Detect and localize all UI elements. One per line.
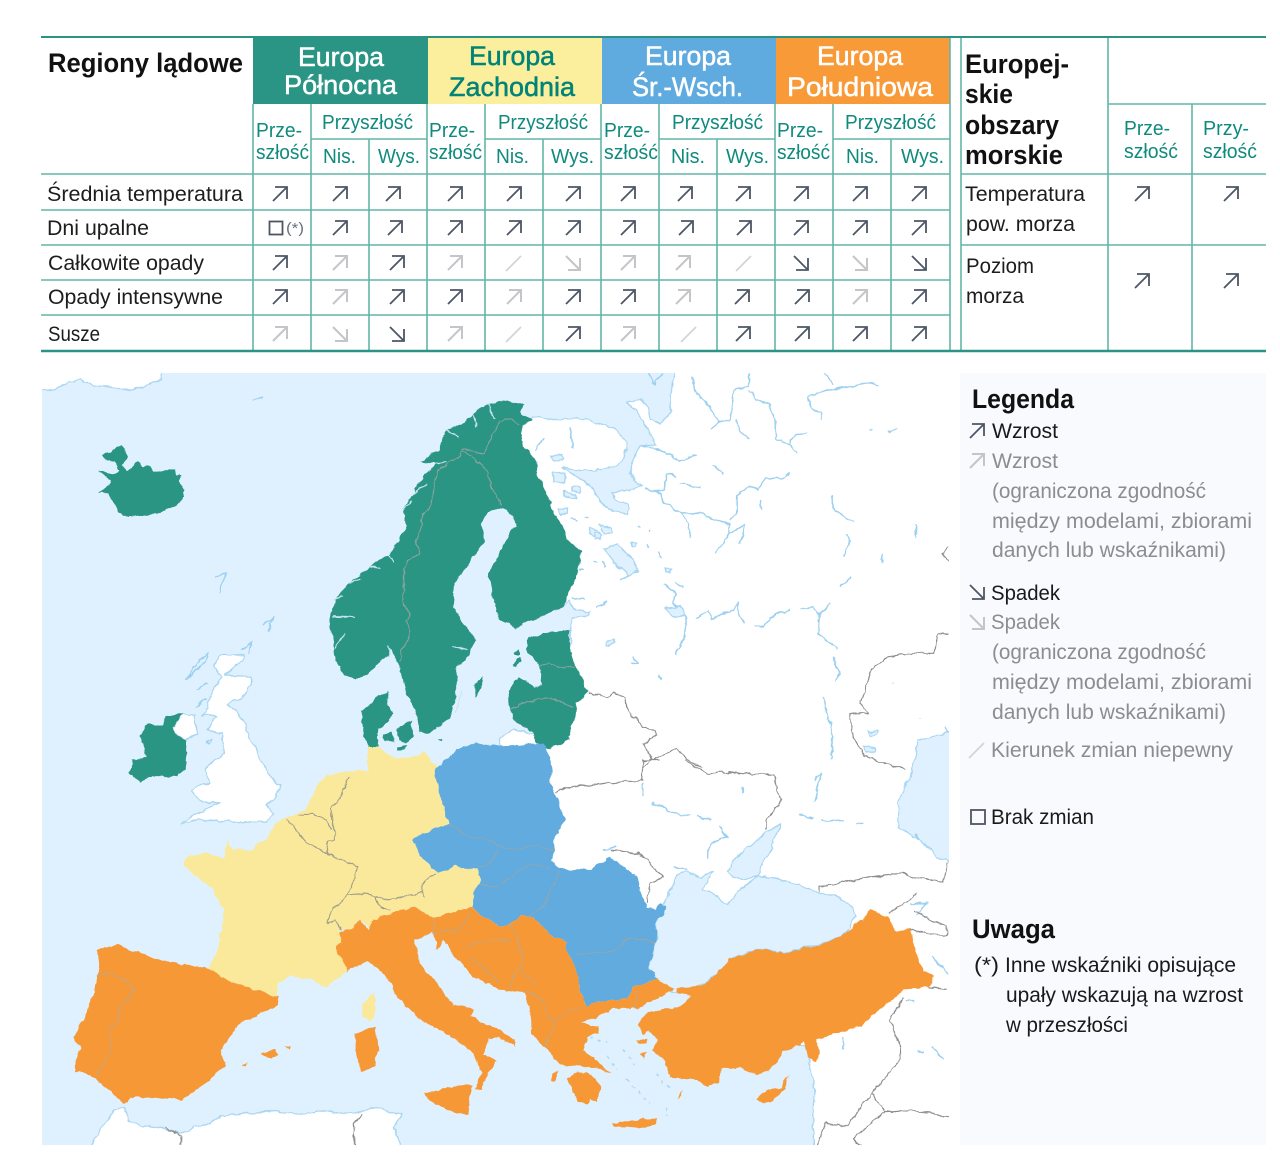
sea: Black Sea and Sea of Azov — [648, 727, 967, 993]
heading: Regiony lądowe: Regiony lądowe — [48, 48, 243, 78]
column labels: Europa Środkowo-Wschodnia: Przyszłość — [672, 112, 763, 134]
column labels: marine areas — [1124, 118, 1257, 163]
row: Poziom morza — [966, 255, 1238, 308]
column labels: marine areas: Prze- — [1124, 118, 1170, 140]
legend item: Brak zmian: Brak zmian — [991, 806, 1094, 829]
header: Europa Południowa: Południowa — [787, 72, 934, 102]
row: Dni upalne: (*) — [286, 220, 304, 237]
row: Opady intensywne — [48, 286, 926, 309]
land: United Kingdom — [170, 397, 280, 823]
header: Europa Zachodnia — [428, 37, 602, 104]
column labels: Europa Północna — [256, 112, 420, 168]
heading: Europejskie obszary morskie: skie — [965, 79, 1013, 109]
column labels: Europa Środkowo-Wschodnia: Nis. — [671, 146, 705, 168]
header: Europa Północna — [253, 37, 428, 104]
column labels: Europa Zachodnia: Wys. — [551, 146, 594, 168]
land: North Africa — [90, 1106, 403, 1145]
header: Europa Środkowo-Wschodnia — [602, 37, 776, 104]
Balearic Islands — [262, 1048, 278, 1060]
row: Całkowite opady: Całkowite opady — [48, 252, 204, 275]
column labels: Europa Zachodnia: szłość — [429, 142, 482, 164]
row: Poziom morza: morza — [966, 285, 1024, 308]
Baltic states — [508, 630, 588, 748]
Norway, Sweden, Finland — [330, 400, 583, 733]
legend item: Spadek: Spadek — [991, 582, 1060, 605]
column labels: Europa Zachodnia: Nis. — [496, 146, 529, 168]
legend item: Wzrost, limited agreement — [970, 450, 1252, 562]
column labels: Europa Środkowo-Wschodnia — [604, 112, 769, 168]
Crete — [612, 1118, 657, 1128]
column labels: Europa Zachodnia: Przyszłość — [498, 112, 588, 134]
Germany, Benelux, France, Switzerland, Austria — [183, 747, 480, 997]
header: Europa Północna: Północna — [284, 70, 398, 100]
heading: Europejskie obszary morskie: morskie — [965, 140, 1063, 170]
legend item: Wzrost, limited agreement: Wzrost — [992, 450, 1058, 473]
Italy — [335, 907, 515, 1088]
Iceland — [97, 446, 184, 517]
row: Dni upalne — [47, 217, 926, 240]
land: eastern Europe and the Middle East — [500, 357, 973, 1170]
column labels: marine areas: Przy- — [1203, 118, 1249, 140]
legend item: Kierunek zmian niepewny: Kierunek zmian niepewny — [991, 739, 1234, 762]
Ireland — [128, 713, 187, 782]
column labels: Europa Południowa: szłość — [777, 142, 830, 164]
note text: Inne wskaźniki opisujące — [1005, 954, 1236, 977]
column labels: Europa Południowa — [777, 112, 944, 168]
borders: Scandinavia and Baltic states — [400, 418, 575, 710]
column labels: Europa Południowa: Nis. — [846, 146, 879, 168]
legend item: Spadek, limited agreement — [970, 611, 1252, 724]
heading: Legenda: Legenda — [972, 384, 1075, 414]
column labels: Europa Północna: Prze- — [256, 120, 302, 142]
row: Średnia temperatura — [47, 182, 926, 206]
column labels: Europa Północna: szłość — [256, 142, 309, 164]
legend item: Spadek, limited agreement: Spadek — [991, 611, 1060, 634]
note text: w przeszłości — [1005, 1014, 1128, 1037]
note text — [974, 954, 1243, 1037]
column labels: Europa Południowa: Wys. — [901, 146, 944, 168]
legend item: Wzrost, limited agreement: danych lub wskaźnikami) — [992, 539, 1226, 562]
legend item: Spadek, limited agreement: (ograniczona zgodność — [992, 641, 1206, 664]
header: Europa Północna: Europa — [298, 42, 385, 72]
Cyprus — [757, 1073, 789, 1103]
column labels: Europa Zachodnia: Prze- — [429, 120, 475, 142]
Poland, Czechia, Slovakia, Hungary, Romania, Bulgaria — [412, 743, 666, 1007]
header: Europa Środkowo-Wschodnia: Śr.-Wsch. — [632, 70, 743, 102]
region: Europa Południowa (orange) — [73, 907, 935, 1128]
heading: Europejskie obszary morskie: obszary — [965, 110, 1059, 140]
Corsica — [362, 992, 375, 1022]
rivers and lakes: northern Russia — [535, 373, 948, 760]
heading: Europejskie obszary morskie — [965, 49, 1069, 170]
column labels: Europa Środkowo-Wschodnia: Prze- — [604, 120, 650, 142]
borders: southern Europe — [97, 913, 500, 1075]
Iberian Peninsula — [73, 907, 515, 1115]
column labels: Europa Środkowo-Wschodnia: Wys. — [726, 146, 769, 168]
legend item: Spadek, limited agreement: między modelami, zbiorami — [992, 671, 1252, 694]
Balkan Peninsula — [433, 908, 675, 1073]
row: Całkowite opady — [48, 252, 926, 275]
heading: Europejskie obszary morskie: Europej- — [965, 49, 1069, 79]
region: Europa Północna (teal) — [97, 400, 588, 782]
Denmark — [362, 690, 393, 747]
column labels: Europa Południowa: Przyszłość — [845, 112, 936, 134]
region: Europa Zachodnia (yellow) — [183, 747, 480, 1022]
legend item: Wzrost, limited agreement: (ograniczona zgodność — [992, 480, 1206, 503]
map of Europe — [42, 373, 949, 1145]
column labels: Europa Północna: Przyszłość — [322, 112, 413, 134]
borders: central and eastern Europe — [448, 823, 657, 955]
row: Temperatura pow. morza: Temperatura — [965, 183, 1085, 206]
column labels: marine areas: szłość — [1124, 141, 1178, 163]
panel: legend and note — [960, 373, 1266, 1145]
column labels: Europa Zachodnia — [429, 112, 594, 168]
header: Europa Południowa: Europa — [817, 41, 904, 71]
legend item: Wzrost: Wzrost — [992, 420, 1058, 443]
column labels: Europa Północna: Wys. — [378, 146, 420, 168]
column labels: Europa Południowa: Prze- — [777, 120, 823, 142]
column labels: marine areas: szłość — [1203, 141, 1257, 163]
legend item: Wzrost, limited agreement: między modelami, zbiorami — [992, 510, 1252, 533]
header: Europa Zachodnia: Europa — [469, 41, 556, 71]
row: Temperatura pow. morza: pow. morza — [966, 213, 1075, 236]
borders: western Europe — [287, 777, 435, 930]
rivers and lakes: Ukraine and south-west Russia — [603, 773, 948, 1060]
row: Dni upalne: Dni upalne — [47, 217, 149, 240]
land: Greenland fragment — [42, 373, 162, 392]
note text: (*) — [974, 954, 999, 977]
region: Europa Środkowo-Wschodnia (blue) — [412, 743, 666, 1007]
note text: upały wskazują na wzrost — [1006, 984, 1243, 1007]
row: Opady intensywne: Opady intensywne — [48, 286, 223, 309]
Sicily — [423, 1085, 472, 1115]
sea: Caspian Sea — [897, 730, 949, 864]
column labels: Europa Środkowo-Wschodnia: szłość — [604, 142, 658, 164]
header: Europa Południowa — [776, 37, 950, 104]
row: Średnia temperatura: Średnia temperatura — [47, 182, 243, 206]
fjords and lakes on Scandinavia — [333, 403, 495, 713]
heading: Uwaga: Uwaga — [972, 914, 1056, 944]
Aegean islands — [637, 1039, 647, 1044]
Gotland — [473, 677, 482, 698]
Aegean island specks — [590, 1037, 670, 1117]
row: Poziom morza: Poziom — [966, 255, 1034, 278]
row: Susze: Susze — [48, 323, 100, 346]
row: Susze — [48, 323, 926, 346]
Turkey — [638, 910, 935, 1087]
row: Temperatura pow. morza — [965, 183, 1238, 236]
Peloponnese — [567, 1072, 600, 1103]
Sardinia — [355, 1027, 378, 1073]
borders: eastern Europe and the Middle East — [588, 547, 948, 770]
column labels: Europa Północna: Nis. — [323, 146, 356, 168]
header: Europa Zachodnia: Zachodnia — [449, 72, 576, 102]
table: land regions and marine areas — [41, 37, 1266, 351]
header: Europa Środkowo-Wschodnia: Europa — [645, 41, 732, 71]
legend item: Spadek, limited agreement: danych lub wskaźnikami) — [992, 701, 1226, 724]
